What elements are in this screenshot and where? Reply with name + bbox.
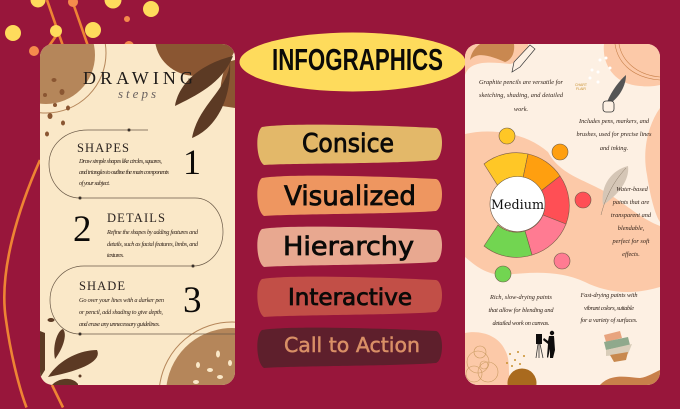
decorative peach blobs bbox=[465, 44, 660, 385]
step 2: details: 2 bbox=[73, 209, 92, 250]
text: ink: Includes pens, markers, and bbox=[578, 118, 650, 125]
text: acrylic bbox=[580, 292, 638, 324]
step 1: shapes: and triangles to outline the main components bbox=[79, 169, 170, 176]
step 3: shade: and erase any unnecessary guidelines. bbox=[79, 321, 160, 328]
decorative bottom right circle bbox=[160, 322, 235, 385]
text: watercolor: perfect for soft bbox=[611, 238, 650, 245]
step 1: shapes: 1 bbox=[183, 142, 201, 182]
text: oil: Rich, slow-drying paints bbox=[489, 294, 553, 301]
text: watercolor: blendable, bbox=[618, 225, 645, 232]
decorative branches and dots bbox=[4, 0, 159, 408]
text: watercolor bbox=[611, 186, 652, 258]
donut chart bbox=[484, 153, 569, 257]
step 3: shade bbox=[79, 279, 202, 328]
text: watercolor: transparent and bbox=[611, 212, 652, 219]
text: acrylic: for a variety of surfaces. bbox=[580, 317, 638, 324]
text: acrylic: Fast-drying paints with bbox=[580, 292, 638, 299]
legend dots bbox=[495, 128, 591, 282]
text: graphite bbox=[479, 79, 564, 113]
text: ink bbox=[576, 118, 652, 152]
text: watercolor: effects. bbox=[622, 251, 640, 258]
decorative top left circle bbox=[40, 44, 106, 136]
step 1: shapes: Draw simple shapes like circles, squares, bbox=[78, 158, 162, 165]
bar: Call to Action: Call to Action bbox=[284, 333, 420, 357]
icon: small label bbox=[575, 83, 588, 91]
bar: Interactive bbox=[257, 277, 442, 317]
step 2: details: textures. bbox=[107, 252, 124, 259]
decorative top right leaves bbox=[156, 44, 235, 138]
step 3: shade: Go over your lines with a darker pen bbox=[79, 297, 164, 304]
icon: pencil bbox=[512, 45, 535, 72]
icon: small label: FLAIR bbox=[576, 87, 586, 91]
bar: Consice bbox=[257, 125, 442, 165]
step 1: shapes: SHAPES bbox=[77, 141, 129, 155]
step 3: shade: or pencil, add shading to give depth, bbox=[79, 309, 163, 316]
text: watercolor: paints that are bbox=[612, 199, 649, 206]
heading: drawing steps: steps bbox=[118, 86, 156, 101]
text: oil: that allow for blending and bbox=[488, 307, 554, 314]
step 2: details: Refine the shapes by adding features and bbox=[106, 229, 199, 236]
step 1: shapes: of your subject. bbox=[79, 180, 110, 187]
step 3: shade: SHADE bbox=[79, 279, 125, 293]
heading: drawing steps bbox=[83, 68, 193, 101]
text: graphite: sketching, shading, and detailed bbox=[479, 92, 564, 99]
panel: drawing steps bbox=[40, 44, 235, 385]
bar: Consice: Consice bbox=[302, 129, 394, 159]
title banner: INFOGRAPHICS bbox=[272, 42, 443, 77]
text: oil: detailed work on canvas. bbox=[492, 320, 550, 327]
step 1: shapes bbox=[77, 141, 201, 187]
text: graphite: Graphite pencils are versatile for bbox=[479, 79, 564, 86]
icon: small label: CHART bbox=[575, 83, 588, 87]
bar: Visualized: Visualized bbox=[284, 181, 416, 212]
heading: drawing steps: DRAWING bbox=[83, 68, 193, 88]
text: ink: brushes, used for precise lines bbox=[576, 131, 652, 138]
text: acrylic: vibrant colors, suitable bbox=[584, 305, 634, 312]
donut center label: Medium bbox=[491, 198, 544, 213]
text: ink: and inking. bbox=[600, 145, 628, 152]
step 3: shade: 3 bbox=[183, 280, 202, 321]
panel: medium bbox=[465, 44, 660, 385]
icon: feather bbox=[601, 166, 628, 215]
title banner bbox=[240, 32, 466, 92]
icon: painter silhouette bbox=[536, 331, 555, 358]
bar: Interactive: Interactive bbox=[288, 285, 412, 311]
text: watercolor: Water-based bbox=[616, 186, 649, 193]
bar: Hierarchy bbox=[257, 227, 442, 267]
text: graphite: work. bbox=[514, 106, 528, 113]
connector line path bbox=[49, 129, 236, 335]
bar: Hierarchy: Hierarchy bbox=[283, 232, 414, 262]
icon: paint swatches bbox=[604, 331, 632, 362]
text: oil bbox=[488, 294, 554, 327]
step 2: details: DETAILS bbox=[107, 211, 165, 225]
bar: Call to Action bbox=[257, 328, 442, 368]
step 2: details bbox=[73, 209, 199, 259]
decorative bottom left leaves bbox=[40, 318, 98, 385]
icon: ink bottle and quill bbox=[603, 75, 626, 112]
step 2: details: details, such as facial features, limbs, and bbox=[107, 241, 199, 248]
bar: Visualized bbox=[257, 176, 442, 216]
